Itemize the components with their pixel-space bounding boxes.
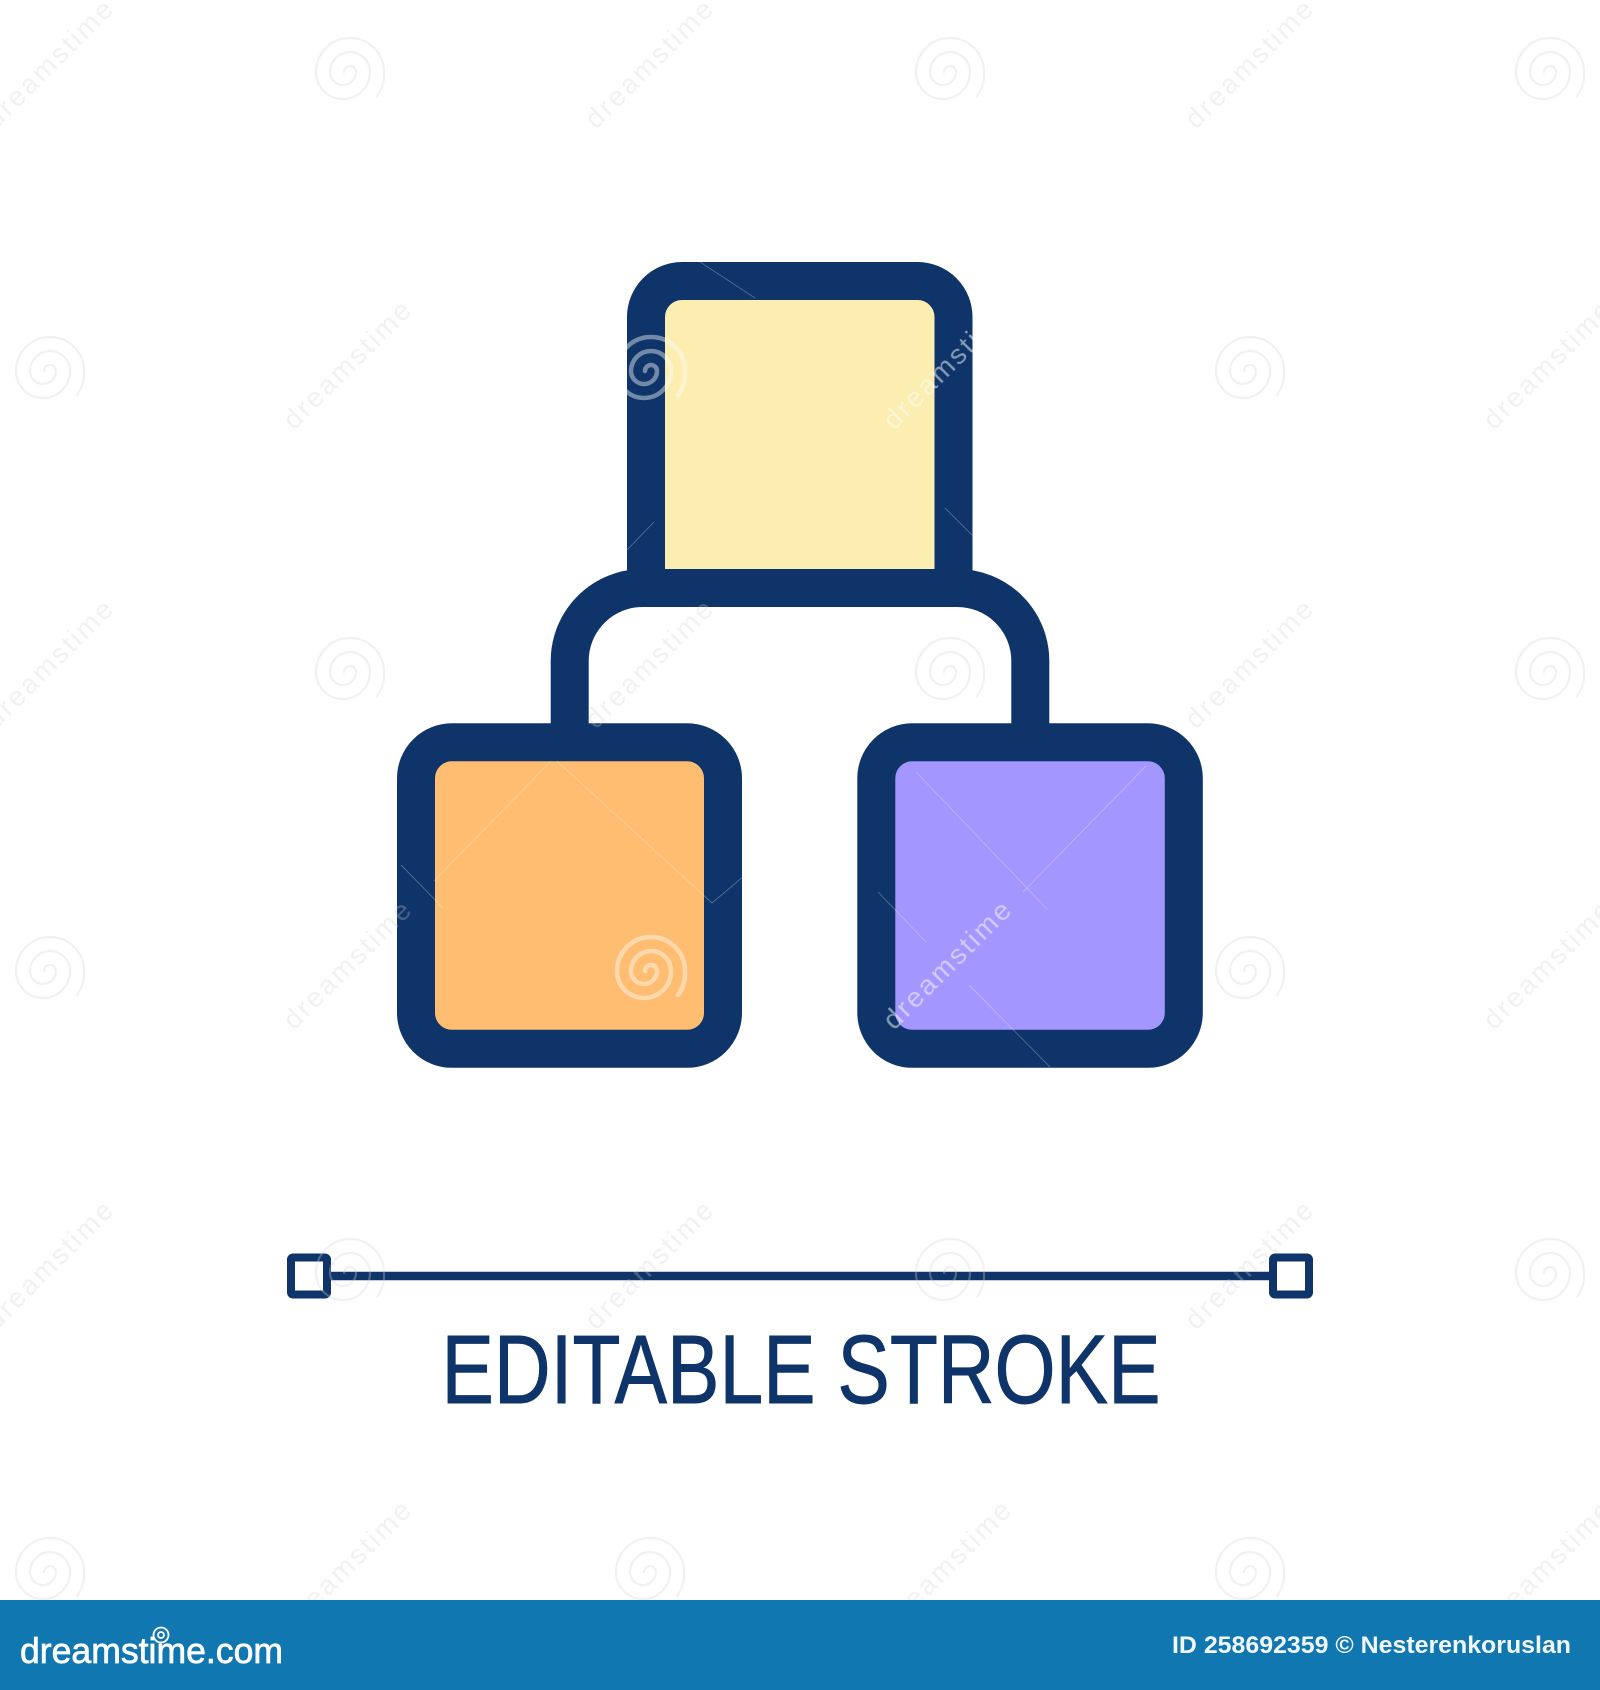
- left node: orange square: [416, 742, 723, 1049]
- caption: editable stroke: EDITABLE STROKE: [442, 1315, 1160, 1424]
- top node: yellow square: [646, 281, 954, 588]
- icon: hierarchy diagram: [416, 281, 1184, 1049]
- footer logo spiral: [154, 1628, 168, 1642]
- watermark wordmarks: dreamstime: [1178, 594, 1319, 734]
- right handle: [1273, 1258, 1309, 1294]
- watermark spirals over the icon: [617, 337, 685, 998]
- watermark wordmarks over the icon: dreamstime: [876, 295, 1017, 435]
- watermark wordmarks: dreamstime: [578, 594, 719, 734]
- stroke line: [327, 1272, 1273, 1280]
- editable stroke line with handles: [291, 1258, 1309, 1294]
- watermark wordmarks: dreamstime: [578, 1195, 719, 1335]
- watermark wordmarks over the icon: dreamstime: [876, 895, 1017, 1035]
- image id and author credit: ID 258692359 © Nesterenkoruslan: [1172, 1632, 1571, 1659]
- watermark wordmarks over the icon: [876, 295, 1017, 1035]
- watermark wordmarks: dreamstime: [276, 895, 417, 1035]
- left handle: [291, 1258, 327, 1294]
- watermark wordmarks: dreamstime: [276, 1495, 417, 1635]
- footer bar: [0, 1600, 1600, 1690]
- right node: purple square: [876, 742, 1184, 1049]
- watermark lattice lines over the icon: [401, 262, 1146, 1067]
- watermark wordmarks: dreamstime: [876, 1495, 1017, 1635]
- footer logo: dreamstime.com: dreamstime.com: [20, 1630, 283, 1671]
- watermark wordmarks: dreamstime: [1178, 1195, 1319, 1335]
- connector between nodes: [570, 588, 1030, 726]
- watermark wordmarks: dreamstime: [276, 295, 417, 435]
